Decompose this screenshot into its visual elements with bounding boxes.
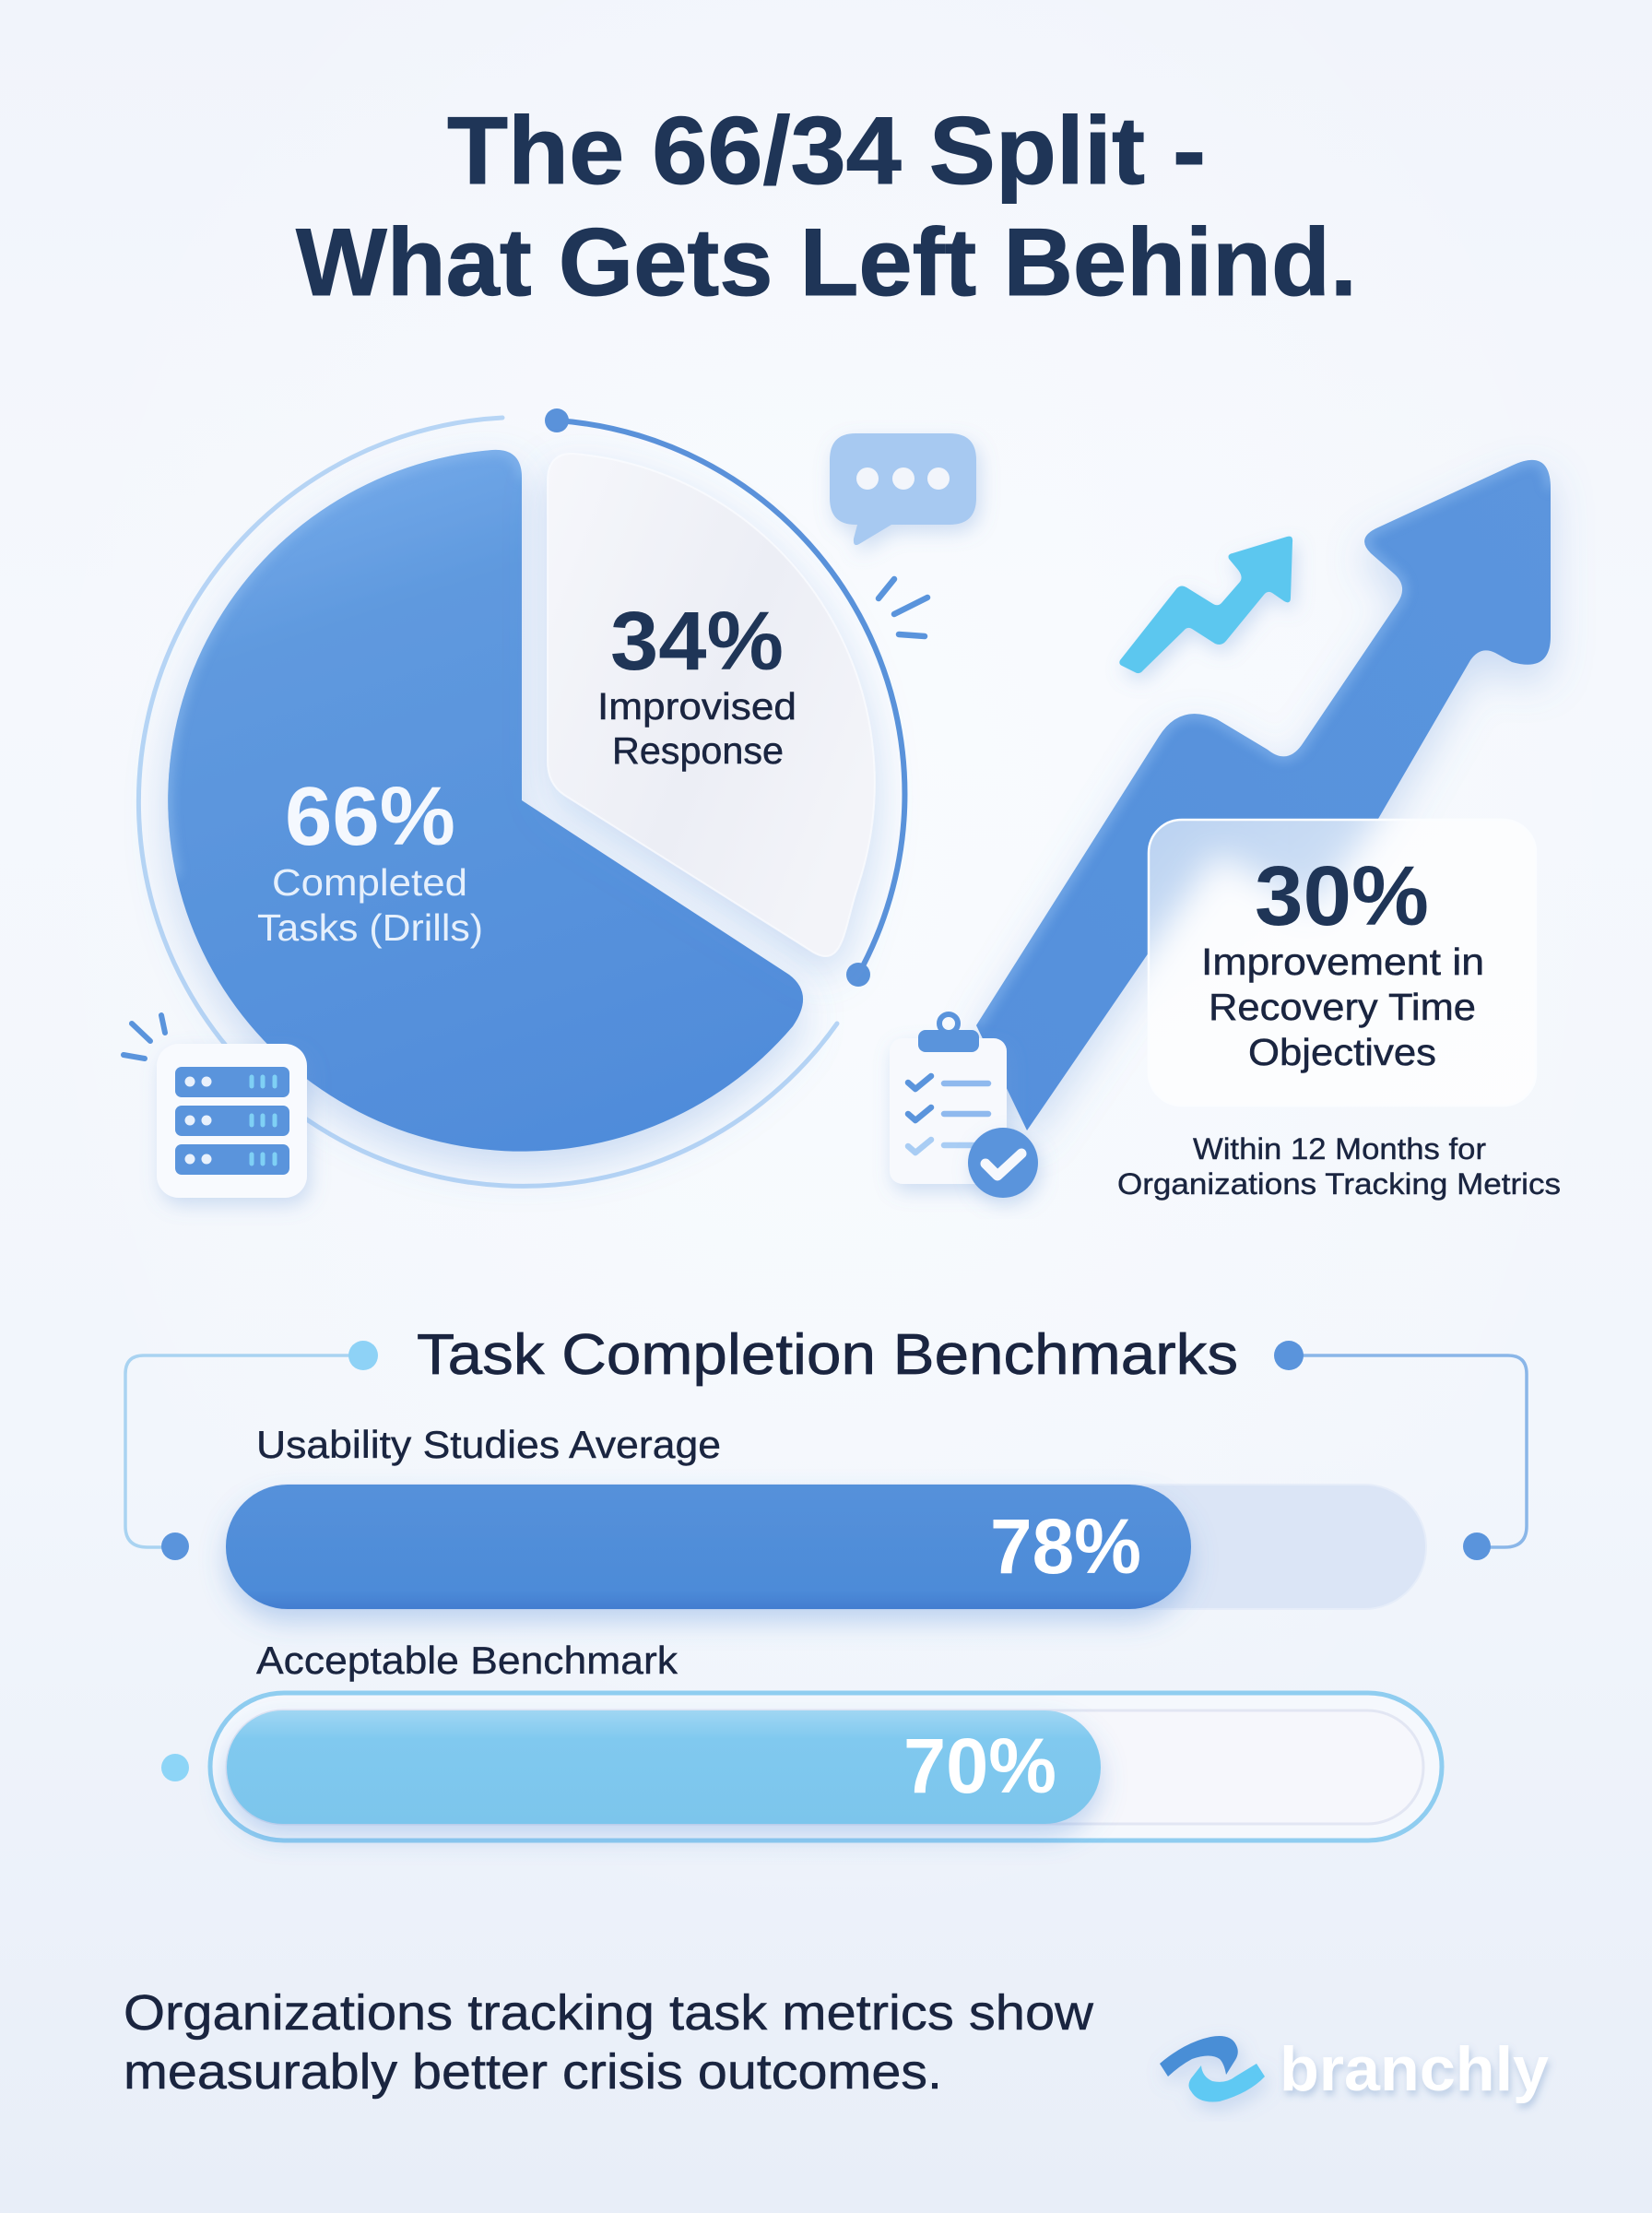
- label: 66 percent: Tasks (Drills): [257, 906, 483, 949]
- panel: 30 percent callout: [1147, 819, 1535, 1105]
- icon: server: [124, 1015, 307, 1198]
- chart: big growth arrow: [976, 460, 1551, 1130]
- closing statement: Organizations tracking task metrics show: [124, 1985, 1094, 2041]
- left bracket connector: [125, 1341, 378, 1560]
- improvement description: Recovery Time: [1209, 986, 1476, 1028]
- panel: pie chart: [138, 408, 904, 1186]
- title: [296, 98, 1357, 316]
- slice: 34 percent improvised response: [548, 454, 875, 956]
- icon: chat bubble: [830, 433, 976, 545]
- logo wordmark: branchly: [1280, 2034, 1549, 2104]
- label: 34 percent: [597, 596, 796, 772]
- slice: 66 percent completed tasks: [167, 450, 803, 1152]
- bar: acceptable benchmark 70 percent: 70%: [903, 1722, 1056, 1809]
- bar: acceptable benchmark 70 percent: [210, 1693, 1442, 1840]
- caption: within 12 months: Within 12 Months for: [1193, 1132, 1486, 1166]
- logo mark: [1160, 2036, 1265, 2102]
- title: The 66/34 Split -: [447, 98, 1206, 205]
- label: usability studies average: Usability Studies Average: [256, 1423, 721, 1466]
- improvement description: Objectives: [1248, 1031, 1436, 1073]
- logo: branchly: [1160, 2034, 1549, 2104]
- label: 66 percent: Completed: [272, 861, 467, 904]
- improvement description: Improvement in: [1201, 941, 1484, 983]
- right bracket connector: [1274, 1341, 1527, 1560]
- label: 34 percent: Response: [612, 729, 784, 772]
- outer light ring: [138, 418, 837, 1186]
- caption: within 12 months: [1117, 1132, 1561, 1201]
- bar: usability studies 78 percent: [226, 1485, 1426, 1609]
- dot: acceptable benchmark marker: [161, 1754, 189, 1781]
- closing statement: measurably better crisis outcomes.: [124, 2044, 942, 2100]
- improvement description: [1201, 941, 1484, 1073]
- caption: within 12 months: Organizations Tracking Metrics: [1117, 1167, 1561, 1201]
- icon: clipboard with check badge: [890, 1014, 1038, 1198]
- label: 66 percent: [257, 771, 483, 949]
- closing statement: [124, 1985, 1094, 2100]
- dark progress arc: [545, 408, 904, 987]
- 30 percent value: 30%: [1255, 849, 1429, 943]
- label: 34 percent: Improvised: [597, 685, 796, 728]
- title: What Gets Left Behind.: [296, 209, 1357, 316]
- icon: chat sparks: [879, 579, 927, 636]
- label: 34 percent: 34%: [610, 596, 784, 688]
- heading: task completion benchmarks: Task Completion Benchmarks: [417, 1323, 1238, 1387]
- label: acceptable benchmark: Acceptable Benchmark: [256, 1639, 678, 1682]
- icon: small cyan arrow: [1119, 537, 1292, 673]
- label: 66 percent: 66%: [285, 771, 455, 863]
- bar: usability studies 78 percent: 78%: [990, 1503, 1141, 1590]
